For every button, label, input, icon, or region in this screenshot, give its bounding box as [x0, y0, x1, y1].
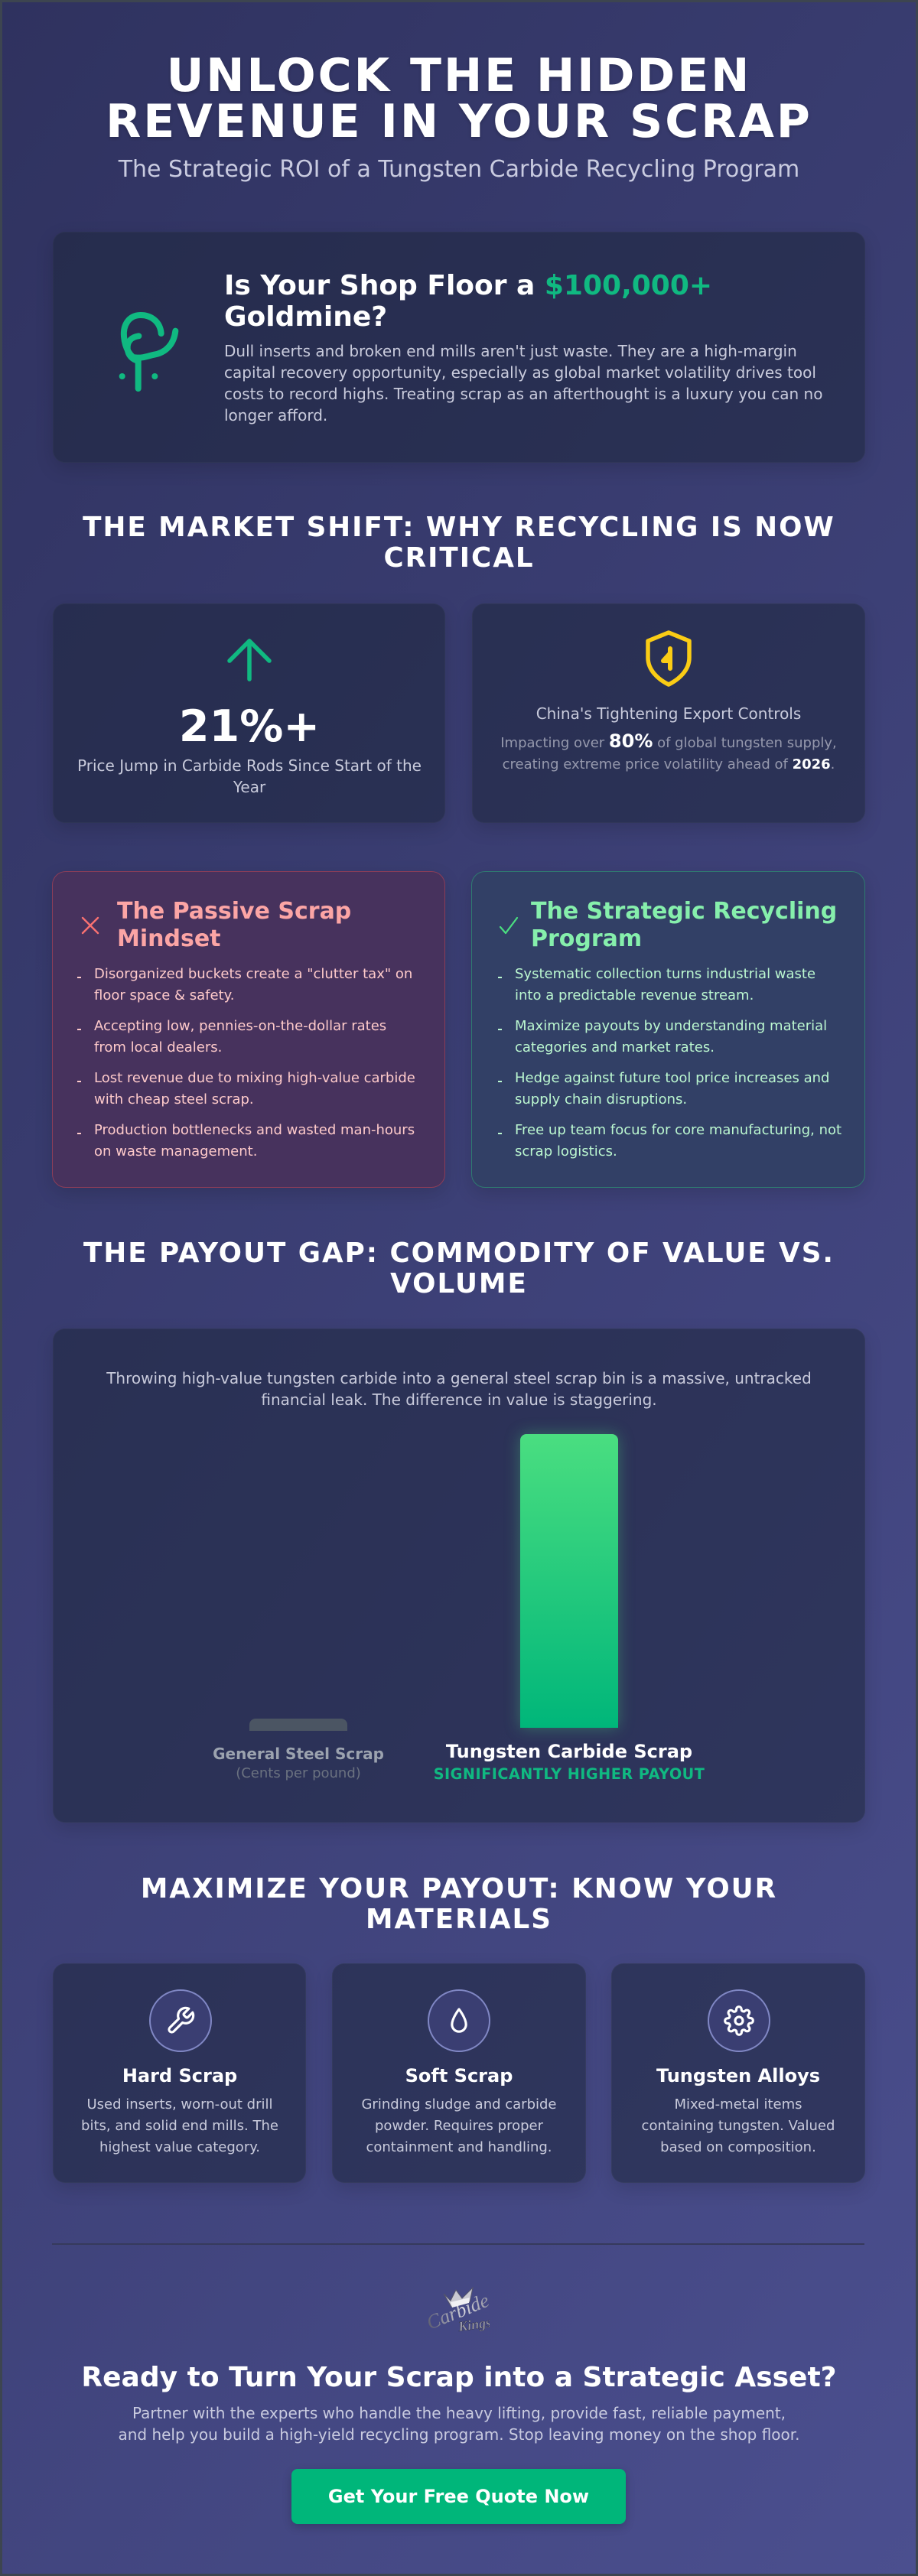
CTA heading: Ready to Turn Your Scrap into a Strategic Asset? [81, 2362, 837, 2393]
bar: tungsten carbide scrap [520, 1434, 618, 1728]
hero text: capital recovery opportunity, especially as global market volatility drives tool [224, 363, 816, 382]
strategic list: into a predictable revenue stream. [515, 987, 754, 1003]
icon: droplet [428, 1989, 490, 2052]
CTA button [291, 2469, 626, 2524]
panel: hard scrap [53, 1963, 306, 2183]
subtitle: The Strategic ROI of a Tungsten Carbide Recycling Program [119, 156, 799, 183]
passive list: with cheap steel scrap. [94, 1091, 254, 1107]
export text: creating extreme price volatility ahead of 2026. [503, 756, 835, 772]
card text: Used inserts, worn-out drill [87, 2096, 272, 2113]
icon: shield [646, 630, 692, 687]
panel: hero goldmine [53, 232, 865, 463]
card text: highest value category. [99, 2139, 260, 2155]
icon: gear [708, 1989, 770, 2052]
strategic list: Maximize payouts by understanding material [515, 1018, 827, 1034]
card text: bits, and solid end mills. The [81, 2118, 278, 2134]
panel: export controls [472, 603, 865, 823]
export heading: China's Tightening Export Controls [536, 704, 801, 723]
passive list: Disorganized buckets create a "clutter tax" on [94, 966, 412, 982]
CTA button: Get Your Free Quote Now [328, 2486, 589, 2507]
panel: soft scrap [332, 1963, 586, 2183]
passive list: Production bottlenecks and wasted man-hours [94, 1122, 415, 1138]
card text: Mixed-metal items [674, 2096, 802, 2113]
panel: tungsten alloys [611, 1963, 865, 2183]
heading: payout gap: VOLUME [390, 1268, 528, 1299]
strategic heading: Program [531, 925, 642, 952]
icon: wrench [149, 1989, 212, 2052]
card title: Tungsten Alloys [656, 2065, 820, 2086]
hero text [224, 342, 822, 424]
bar: general steel scrap [249, 1719, 347, 1731]
icon: cross [81, 916, 99, 935]
hero text: longer afford. [224, 406, 327, 424]
CTA text: Partner with the experts who handle the heavy lifting, provide fast, reliable payment, [132, 2404, 786, 2422]
card title: Hard Scrap [122, 2065, 237, 2086]
chart intro text: Throwing high-value tungsten carbide into a general steel scrap bin is a massive, untracked [106, 1369, 812, 1387]
hero heading: Is Your Shop Floor a $100,000+ [224, 270, 712, 301]
heading: materials [141, 1873, 777, 1935]
heading: payout gap: THE PAYOUT GAP: COMMODITY OF VALUE VS. [83, 1238, 835, 1269]
CTA text: and help you build a high-yield recycling program. Stop leaving money on the shop floor. [118, 2425, 800, 2444]
panel: strategic recycling program [471, 871, 865, 1188]
passive list: floor space & safety. [94, 987, 234, 1003]
card text [642, 2096, 835, 2155]
hero heading: Goldmine? [224, 301, 387, 333]
passive list: on waste management. [94, 1143, 257, 1160]
passive heading [117, 898, 351, 952]
strategic list: Free up team focus for core manufacturing, not [515, 1122, 842, 1138]
title [106, 49, 812, 148]
heading: materials: MATERIALS [366, 1904, 552, 1935]
passive list [77, 966, 415, 1160]
passive heading: The Passive Scrap [117, 898, 351, 925]
icon: recycling sprout [119, 312, 179, 392]
card title: Soft Scrap [405, 2065, 513, 2086]
heading: materials: MAXIMIZE YOUR PAYOUT: KNOW YOUR [141, 1873, 777, 1904]
card text: based on composition. [660, 2139, 816, 2155]
passive list: Accepting low, pennies-on-the-dollar rates [94, 1018, 386, 1034]
CTA text [118, 2404, 800, 2444]
icon: check [499, 916, 519, 935]
strategic list: categories and market rates. [515, 1039, 715, 1055]
passive list: Lost revenue due to mixing high-value carbide [94, 1070, 415, 1086]
tungsten label: Tungsten Carbide Scrap [446, 1741, 692, 1762]
title: UNLOCK THE HIDDEN [167, 49, 751, 102]
heading: market shift [83, 512, 835, 574]
strategic list: Hedge against future tool price increases and [515, 1070, 829, 1086]
tungsten sublabel: SIGNIFICANTLY HIGHER PAYOUT [434, 1765, 705, 1783]
steel label: General Steel Scrap [213, 1745, 384, 1763]
steel sublabel: (Cents per pound) [236, 1765, 361, 1781]
title: REVENUE IN YOUR SCRAP [106, 95, 812, 148]
strategic heading: The Strategic Recycling [531, 898, 837, 925]
passive heading: Mindset [117, 925, 221, 952]
heading: payout gap [83, 1238, 835, 1299]
hero text: Dull inserts and broken end mills aren't just waste. They are a high-margin [224, 342, 797, 360]
strategic list: scrap logistics. [515, 1143, 617, 1160]
panel: payout gap chart [53, 1329, 865, 1823]
icon: up arrow [227, 639, 272, 681]
card text [361, 2096, 557, 2155]
chart intro text: financial leak. The difference in value is staggering. [261, 1390, 657, 1409]
hero text: costs to record highs. Treating scrap as an afterthought is a luxury you can no [224, 385, 822, 403]
export text: Impacting over 80% of global tungsten supply, [500, 730, 837, 752]
panel: price jump stat [53, 603, 445, 823]
card text: Grinding sludge and carbide [361, 2096, 557, 2113]
card text: powder. Requires proper [375, 2118, 543, 2134]
card text: containment and handling. [366, 2139, 552, 2155]
heading: market shift: THE MARKET SHIFT: WHY RECYCLING IS NOW [83, 512, 835, 543]
stat label: Year [233, 778, 265, 796]
heading: market shift: CRITICAL [383, 542, 535, 574]
stat label: Price Jump in Carbide Rods Since Start of the [77, 756, 422, 775]
strategic list: Systematic collection turns industrial waste [515, 966, 815, 982]
export text [500, 730, 837, 772]
strategic heading [531, 898, 837, 952]
panel: passive scrap mindset [52, 871, 445, 1188]
card text [81, 2096, 278, 2155]
stat label [77, 756, 422, 796]
hero heading [224, 270, 712, 333]
stat value: 21%+ [179, 701, 320, 752]
chart intro text [106, 1369, 812, 1409]
strategic list [498, 966, 842, 1160]
passive list: from local dealers. [94, 1039, 222, 1055]
strategic list: supply chain disruptions. [515, 1091, 687, 1107]
card text: containing tungsten. Valued [642, 2118, 835, 2134]
